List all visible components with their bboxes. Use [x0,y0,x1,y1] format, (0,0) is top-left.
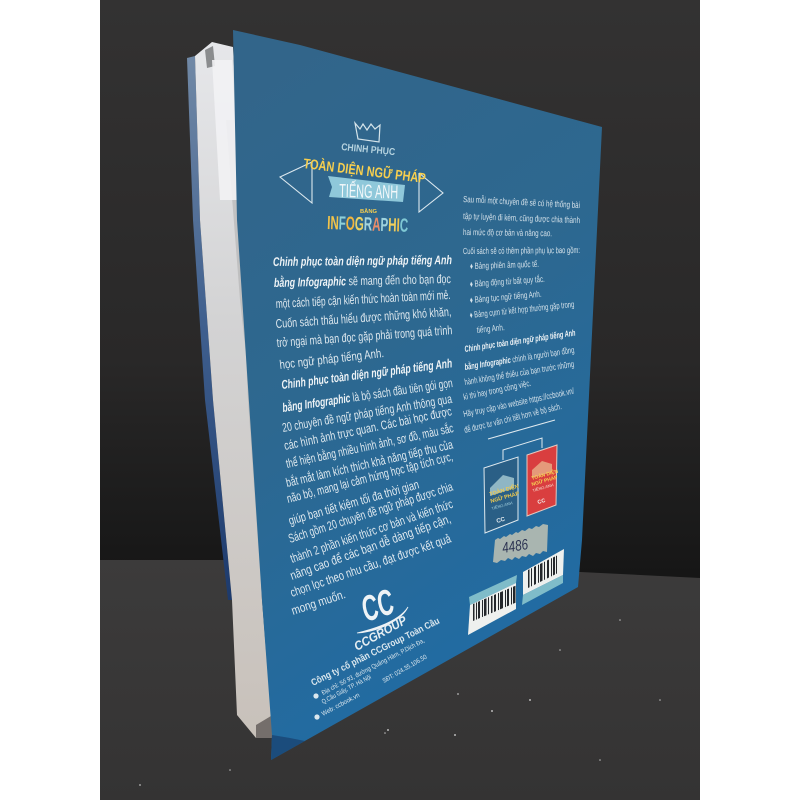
left column text: bằng Infographic là bộ sách đầu tiên gói gọn [281,375,454,415]
left column text: thể hiện bằng nhiều hình ảnh, sơ đồ, màu sắc [284,420,455,471]
heading: toan dien ngu phap: TOÀN DIỆN NGỮ PHÁP [303,154,427,186]
logo swoosh [357,607,408,633]
book thumbnail: blue edition: TIẾNG ANH [491,500,513,511]
left column text: 20 chuyên đề ngữ pháp tiếng Anh thông qua [281,392,453,435]
left column text: não bộ, mang lại cảm hứng học tập tích cực, [285,450,454,506]
book thumbnail: blue edition: CC [496,517,507,525]
right column text: Cuối sách sẽ có thêm phần phụ lục bao gồm: [463,245,580,256]
right column text [462,194,580,435]
left column text: Sách gồm 20 chuyên đề ngữ pháp được chia [287,480,455,546]
divider and connector [488,420,555,460]
right column text: hai mức độ cơ bản và nâng cao. [463,227,552,238]
right column text: tập tự luyện đi kèm, cũng được chia thành [463,211,580,225]
bullet list: ♦ Bảng cụm từ kết hợp thường gặp trong [469,299,575,320]
heading: infographic: INFOGRAPHIC [327,213,409,237]
book page block [195,42,273,738]
publisher contact details: SĐT: 024.35.106.50 [382,654,429,685]
left column text: bằng Infographic sẽ mang đến cho bạn đọc [274,271,451,290]
book thumbnail: red edition: CC [537,498,546,506]
left column text: nâng cao để các bạn dễ dàng tiếp cận, [288,511,453,583]
left column text: học ngữ pháp tiếng Anh. [279,346,385,372]
left column text: Cuốn sách thấu hiểu được những khó khăn, [275,305,452,331]
ribbon: tieng anh: TIẾNG ANH [339,180,398,204]
logo mark: CC: CC [356,581,399,630]
label: bang: BẰNG [360,207,377,215]
left column text: bắt mắt làm kích thích khả năng tiếp thu của [284,437,454,490]
icon: crown [355,123,380,142]
decorative right arrow frame [419,173,443,212]
book front cover panel [233,30,602,760]
barcode: ISBN [468,575,517,635]
photo background [100,0,700,800]
publisher contact details: Công ty cổ phần CCGroup Toàn Cầu [309,616,442,689]
book back cover edge [187,56,232,600]
book thumbnail: red edition: NGỮ PHÁP [531,474,559,488]
cover corner fold shadow [271,735,305,760]
right column text: để được tư vấn chi tiết hơn về bộ sách. [463,401,563,435]
publisher contact details: Q.Cầu Giấy, TP. Hà Nội [320,672,373,706]
right column text: Hãy truy cập vào website https://ccbook.vn/ [462,386,575,419]
right column text: Chinh phục toàn diện ngữ pháp tiếng Anh [464,328,576,354]
left column text: Chinh phục toàn diện ngữ pháp tiếng Anh [273,253,452,269]
price sticker with handwritten code [493,524,548,563]
left column text: các hình ảnh trực quan. Các bài học được [283,404,453,453]
heading: chinh phuc: CHINH PHỤC [341,142,396,158]
right column text: Sau mỗi một chuyên đề sẽ có hệ thống bài [463,194,580,210]
left column text: mong muốn. [290,587,347,618]
bullet list: ♦ Bảng phiên âm quốc tế. [470,259,539,271]
right column text: hành không thể thiếu của bạn trước những [464,359,575,387]
bullet list: tiếng Anh. [476,322,505,335]
left column text: giúp bạn tiết kiệm tối đa thời gian [287,477,421,528]
book thumbnail: blue edition: TOÀN DIỆN [488,482,520,498]
left column text: một cách tiếp cận kiến thức hoàn toàn mới mẻ. [275,288,451,311]
bullet list: ♦ Bảng động từ bất quy tắc. [469,274,545,289]
title block [280,123,443,237]
left column text [273,253,455,618]
book thumbnail: red edition: TIẾNG ANH [532,482,554,493]
left column text: trở ngại mà bạn đọc gặp phải trong quá trình [276,323,453,350]
book thumbnail: red edition: TOÀN DIỆN [530,467,559,482]
decorative left arrow frame [280,162,312,203]
book thumbnail: blue edition [484,457,520,533]
right column text: kì thi hay trong công việc. [462,378,532,402]
left column text: Chinh phục toàn diện ngữ pháp tiếng Anh [281,356,453,392]
right column text: bằng Infographic chính là người bạn đồng [464,344,575,372]
ribbon: tieng anh [328,176,405,204]
publisher logo [352,581,410,654]
book thumbnail: blue edition: NGỮ PHÁP [490,490,520,505]
publisher contact details [309,616,442,720]
barcode: price [522,549,564,605]
left column text: thành 2 phần kiến thức cơ bản và kiến thức [288,497,455,566]
book thumbnail: red edition [527,445,559,516]
publisher contact details: Địa chỉ: Số 93, đường Quảng Hàm, P.Dịch Đa, [320,636,426,697]
price sticker with handwritten code: 4486 [501,536,530,557]
logo wordmark: CCGROUP [352,613,410,654]
bullet list: ♦ Bảng tục ngữ tiếng Anh. [469,289,542,305]
publisher contact details: Web: ccbook.vn [321,692,361,718]
bullet list [469,259,575,335]
left column text: chọn lọc theo nhu cầu, đạt được kết quả [288,532,453,600]
